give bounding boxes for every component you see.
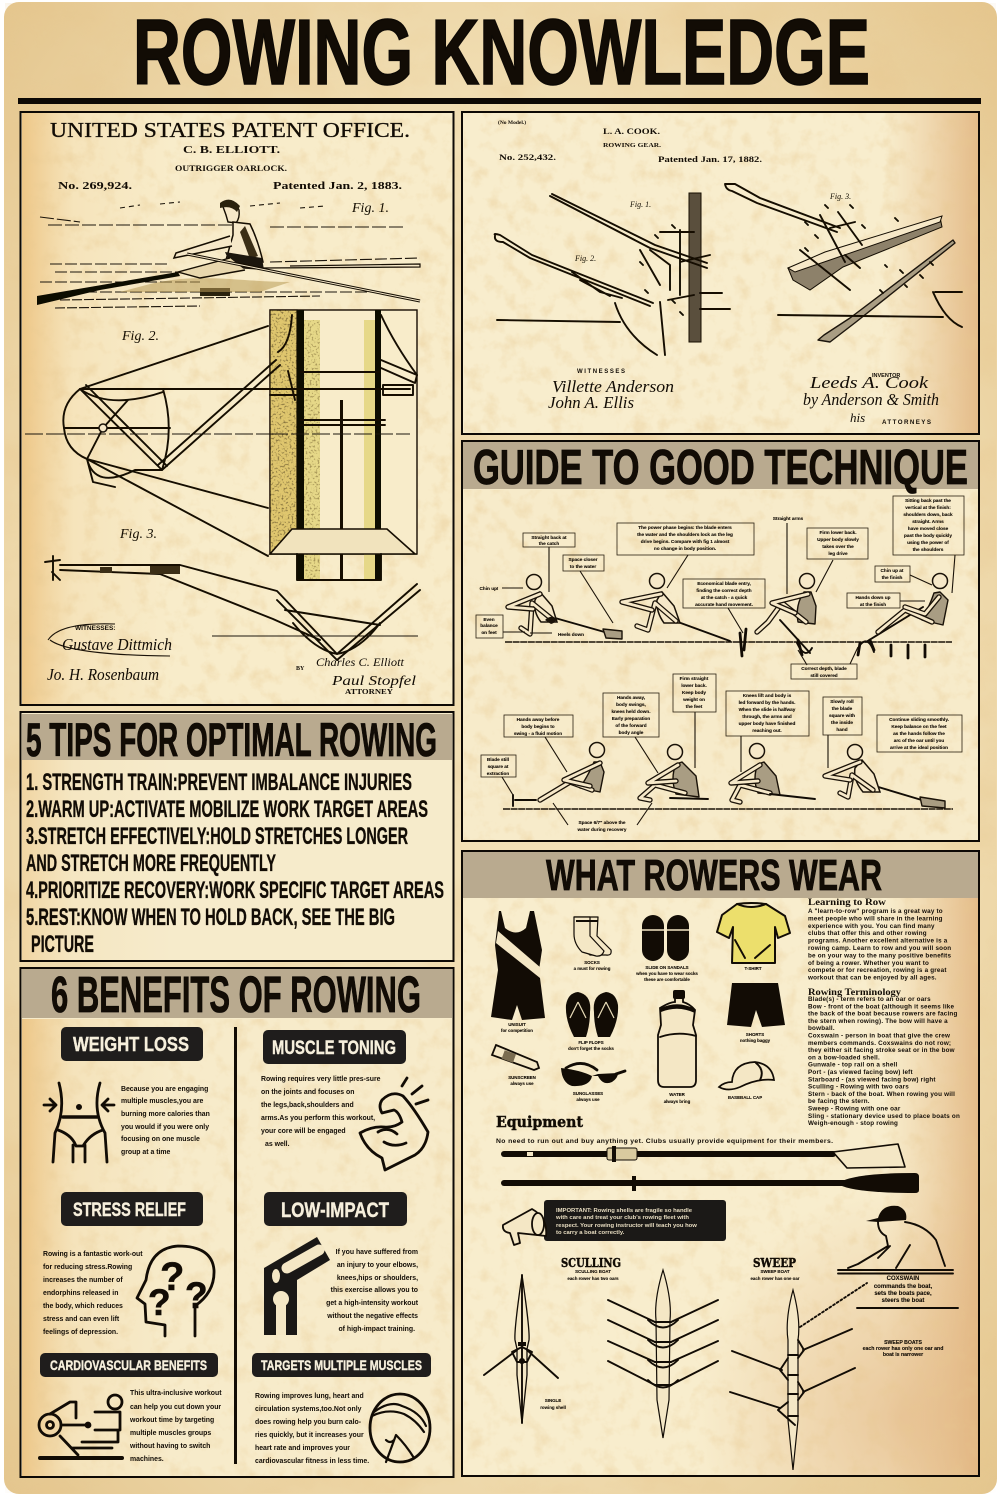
sculling label: each rower has two oars bbox=[567, 1276, 619, 1281]
benefit: cardiovascular: multiple muscles groups bbox=[130, 1430, 211, 1437]
callouts: top row: Chin up! bbox=[479, 586, 499, 591]
benefit: muscle toning: on the joints and focuses on bbox=[261, 1089, 354, 1096]
icon: head with question marks: ? bbox=[148, 1282, 171, 1323]
signatures bbox=[548, 369, 939, 426]
callouts: top row: Correct depth, blade bbox=[801, 666, 847, 671]
important notice: to carry a boat correctly. bbox=[556, 1230, 625, 1236]
callouts: bottom row: Space 6/7" above the bbox=[578, 820, 626, 825]
tips list: 5.REST:KNOW WHEN TO HOLD BACK, SEE THE BIG bbox=[26, 904, 395, 931]
benefit: cardiovascular: machines. bbox=[130, 1456, 164, 1463]
label: SOCKS bbox=[584, 960, 600, 965]
coxswain figure: COXSWAIN bbox=[887, 1276, 919, 1282]
callouts: top row: drive begins. Compare with fig 1 almost bbox=[641, 539, 730, 544]
text: rowing terminology: the back of the boat because rowers are facing bbox=[808, 1011, 958, 1018]
signatures: Leeds A. Cook bbox=[809, 373, 929, 392]
benefit: stress relief: feelings of depression. bbox=[43, 1329, 118, 1336]
benefit: muscle toning bbox=[261, 1030, 428, 1170]
callouts: top row: to the water bbox=[570, 564, 596, 569]
callouts: top row: Straight arms bbox=[773, 516, 804, 521]
patent heading: ROWING GEAR. bbox=[603, 143, 662, 149]
benefit: low-impact: get a high-intensity workout bbox=[326, 1300, 419, 1307]
callouts: top row: Chin up at bbox=[881, 568, 904, 573]
label: WATER bbox=[669, 1092, 686, 1097]
benefit: weight loss: burning more calories than bbox=[121, 1111, 210, 1118]
label: when you have to wear socks bbox=[635, 971, 698, 976]
benefit: stress relief: for reducing stress.Rowing bbox=[43, 1264, 132, 1271]
callouts: bottom row: Hands away before bbox=[517, 717, 560, 722]
label: nothing baggy bbox=[740, 1038, 771, 1043]
icon: slide-on sandals bbox=[642, 915, 689, 961]
text: rowing terminology: Gunwale - top rail on a shell bbox=[808, 1062, 897, 1069]
patent heading bbox=[498, 119, 762, 164]
icon: rowing machine bbox=[39, 1395, 122, 1458]
signatures: by Anderson & Smith bbox=[803, 390, 939, 409]
icon: shorts bbox=[727, 983, 785, 1027]
callouts: bottom row bbox=[481, 674, 962, 832]
rower 1: catch bbox=[508, 574, 622, 639]
text: learning to row: programs. Another excellent alternative is a bbox=[808, 938, 948, 945]
callouts: bottom row: Knees lift and body is bbox=[743, 693, 792, 698]
callouts: top row: the catch bbox=[539, 541, 559, 546]
tips list: 3.STRETCH EFFECTIVELY:HOLD STRETCHES LONGER bbox=[26, 823, 408, 850]
callouts: bottom row: upper body have finished bbox=[739, 721, 796, 726]
icon: head with question marks: ? bbox=[185, 1275, 208, 1316]
callouts: bottom row: extraction bbox=[487, 771, 509, 776]
callouts: top row: still covered bbox=[810, 673, 838, 678]
icon: knee joint bbox=[264, 1237, 330, 1335]
sweep boats note: SWEEP BOATS bbox=[884, 1340, 922, 1346]
coxswain figure: commands the boat, bbox=[874, 1284, 933, 1290]
benefit: targets multiple muscles: Rowing improves lung, heart and bbox=[255, 1393, 364, 1400]
text: rowing terminology: bowball. bbox=[808, 1025, 835, 1032]
benefit: low-impact: knees,hips or shoulders, bbox=[337, 1275, 418, 1282]
callouts: bottom row: body swings, bbox=[616, 702, 646, 707]
figures 1 and 2: oar gear side views: Fig. 1. bbox=[629, 200, 651, 209]
icon: head with question marks: ? bbox=[160, 1255, 184, 1299]
callouts: bottom row: the blade bbox=[832, 706, 853, 711]
callouts: top row: Sitting back past the bbox=[905, 498, 951, 503]
text: learning to row: Learning to Row bbox=[808, 898, 886, 908]
callouts: bottom row: water during recovery bbox=[577, 827, 627, 832]
signatures: John A. Ellis bbox=[548, 393, 634, 412]
callouts: top row: Economical blade entry, bbox=[697, 581, 751, 586]
patent heading: OUTRIGGER OARLOCK. bbox=[175, 164, 287, 173]
benefit: cardiovascular: can help you cut down your bbox=[130, 1404, 221, 1411]
callouts: top row: at the catch - a quick bbox=[701, 595, 748, 600]
tips list bbox=[26, 769, 444, 958]
text: learning to row: clubs that offer this and other rowing bbox=[808, 930, 927, 937]
text: rowing terminology: Port - (as viewed facing bow) left bbox=[808, 1069, 913, 1076]
callouts: top row: straight. Arms bbox=[912, 519, 944, 524]
figures 3 and 4: boat gear views: Fig. 3. bbox=[829, 192, 851, 201]
callouts: bottom row: Keep balance on the feet bbox=[891, 724, 947, 729]
signatures: WITNESSES: bbox=[75, 625, 115, 632]
icon: waist bbox=[44, 1083, 114, 1162]
heading band bbox=[22, 966, 452, 1023]
icon: head with question marks bbox=[137, 1246, 214, 1336]
text: learning to row: of being a rower. Whether you want to bbox=[808, 960, 929, 967]
callouts: top row: balance bbox=[480, 623, 498, 628]
text: learning to row: rowing camp. Learn to row and you will soon bbox=[808, 945, 951, 952]
tips list: 2.WARM UP:ACTIVATE MOBILIZE WORK TARGET AREAS bbox=[26, 796, 428, 823]
text: learning to row: compete or for recreation, rowing is a great bbox=[808, 967, 947, 974]
heading band: 6 BENEFITS OF ROWING bbox=[51, 966, 421, 1023]
callouts: bottom row: swing - a fluid motion bbox=[514, 731, 562, 736]
label: always use bbox=[576, 1097, 600, 1102]
text: learning to row: experience with you. You can find many bbox=[808, 923, 935, 930]
sculling label bbox=[561, 1256, 621, 1281]
text: rowing terminology: Sculling - Rowing with two oars bbox=[808, 1084, 909, 1091]
text: rowing terminology: Coxswain - person in boat that give the crew bbox=[808, 1032, 950, 1040]
benefit: weight loss: WEIGHT LOSS bbox=[73, 1034, 189, 1056]
waterlines bbox=[503, 629, 953, 809]
text: rowing terminology: Sweep - Rowing with one oar bbox=[808, 1106, 901, 1112]
text: rowing terminology: be facing the stern. bbox=[808, 1098, 870, 1105]
leader lines bbox=[502, 523, 955, 825]
callouts: top row: past the body quickly bbox=[904, 533, 952, 538]
callouts: top row: accurate hand movement. bbox=[695, 602, 753, 607]
text: learning to row: A "learn-to-row" program is a great way to bbox=[808, 908, 943, 915]
signatures: Gustave Dittmich bbox=[62, 635, 172, 654]
text: learning to row bbox=[807, 898, 951, 982]
panel: guide to good technique bbox=[462, 441, 979, 841]
clothing and kit icons bbox=[491, 903, 790, 1104]
callouts: bottom row: body angle bbox=[619, 730, 644, 735]
icon: sunscreen bbox=[492, 1045, 539, 1070]
benefit: muscle toning: MUSCLE TONING bbox=[272, 1038, 396, 1059]
signatures: WITNESSES bbox=[577, 369, 625, 375]
patent heading: UNITED STATES PATENT OFFICE. bbox=[50, 118, 410, 142]
benefit: weight loss: Because you are engaging bbox=[121, 1086, 208, 1093]
benefit: muscle toning: your core will be engaged bbox=[261, 1128, 346, 1135]
callouts: bottom row: knees held down. bbox=[611, 709, 651, 714]
important notice: IMPORTANT: Rowing shells are fragile so handle bbox=[556, 1208, 693, 1214]
signatures: Charles C. Elliott bbox=[316, 655, 405, 669]
sweep boats note: boat is narrower bbox=[883, 1352, 923, 1358]
benefit: low-impact: of high-impact training. bbox=[338, 1326, 415, 1333]
benefit: cardiovascular: This ultra-inclusive workout bbox=[130, 1390, 222, 1397]
callouts: bottom row: Continue sliding smoothly. bbox=[889, 717, 949, 722]
benefit: low-impact: this exercise allows you to bbox=[331, 1287, 418, 1294]
callouts: bottom row: the feet bbox=[686, 704, 703, 709]
callouts: top row: no change in body position. bbox=[654, 546, 716, 551]
benefit: low-impact: LOW-IMPACT bbox=[281, 1199, 389, 1222]
benefit: stress relief: increases the number of bbox=[43, 1277, 123, 1284]
boat diagrams bbox=[484, 1206, 958, 1470]
text: rowing terminology: the stern when rowing). The bow will have a bbox=[808, 1018, 948, 1025]
signatures: his bbox=[850, 410, 865, 425]
callouts: top row bbox=[476, 496, 964, 679]
icon: water bottle bbox=[658, 990, 696, 1087]
sweep oar bbox=[504, 1173, 919, 1193]
benefit: weight loss: group at a time bbox=[121, 1149, 171, 1156]
patent heading: L. A. COOK. bbox=[603, 127, 660, 136]
callouts: top row: takes over the bbox=[822, 544, 854, 549]
benefit: targets multiple muscles bbox=[252, 1353, 431, 1465]
label: SHORTS bbox=[746, 1032, 764, 1037]
tips list: 4.PRIORITIZE RECOVERY:WORK SPECIFIC TARGET AREAS bbox=[26, 877, 444, 904]
callouts: top row: shoulders down, back bbox=[903, 512, 953, 517]
tips list: 1. STRENGTH TRAIN:PREVENT IMBALANCE INJURIES bbox=[26, 769, 412, 796]
panel: 6 benefits of rowing bbox=[20, 966, 454, 1477]
heading band bbox=[22, 713, 452, 766]
callouts: top row: Upper body slowly bbox=[817, 537, 859, 542]
sweep eight diagram bbox=[730, 1283, 867, 1470]
text: learning to row: workout that can be enjoyed by all ages. bbox=[807, 975, 937, 982]
benefit: muscle toning: arms.As you perform this workout, bbox=[261, 1115, 375, 1122]
callouts: top row: The power phase begins: the blade enters bbox=[638, 525, 732, 530]
rower figures: bottom row, recovery bbox=[513, 742, 945, 808]
icon: unisuit bbox=[491, 911, 545, 1020]
text: learning to row: be on your way to the many positive benefits bbox=[808, 952, 951, 959]
benefit: stress relief: STRESS RELIEF bbox=[73, 1200, 186, 1221]
label: always bring bbox=[664, 1099, 691, 1104]
quad scull diagram bbox=[608, 1270, 718, 1438]
label: FLIP FLOPS bbox=[578, 1040, 604, 1045]
label: SUNSCREEN bbox=[508, 1075, 536, 1080]
patent heading: (No Model.) bbox=[498, 119, 526, 126]
coxswain figure: sets the boats pace, bbox=[874, 1291, 932, 1297]
benefit: targets multiple muscles: TARGETS MULTIPLE MUSCLES bbox=[261, 1357, 422, 1373]
callouts: bottom row: Slowly roll bbox=[830, 699, 854, 704]
text: rowing terminology: Blade(s) - term refers to an oar or oars bbox=[808, 996, 931, 1003]
callouts: bottom row: reaching out. bbox=[752, 728, 782, 733]
benefit: targets multiple muscles: heart rate and improves your bbox=[255, 1445, 350, 1452]
icon: flip flops bbox=[566, 992, 618, 1037]
callouts: bottom row: lower back. bbox=[681, 683, 707, 688]
callouts: bottom row: through, the arms and bbox=[742, 714, 792, 719]
callouts: top row: finding the correct depth bbox=[696, 588, 752, 593]
text: rowing terminology: on a bow-loaded shell. bbox=[808, 1054, 880, 1061]
patent heading bbox=[50, 118, 410, 192]
benefit: cardiovascular bbox=[39, 1353, 222, 1463]
tips list: AND STRETCH MORE FREQUENTLY bbox=[26, 850, 276, 877]
benefit: muscle toning: Rowing requires very little pres-sure bbox=[261, 1076, 381, 1083]
callouts: bottom row: body begins to bbox=[521, 724, 555, 729]
text: rowing terminology bbox=[808, 988, 960, 1127]
patent heading: Patented Jan. 17, 1882. bbox=[658, 155, 762, 164]
icon: megaphone bbox=[503, 1209, 546, 1245]
figure 2: outrigger plan view bbox=[25, 310, 417, 580]
callouts: top row: the water and the shoulders lock as the leg bbox=[637, 532, 733, 537]
text: rowing terminology: Rowing Terminology bbox=[808, 988, 901, 998]
icon: circled muscle bbox=[370, 1394, 430, 1462]
rower 6: arms away bbox=[640, 744, 708, 800]
figure 1: rower in scull bbox=[37, 200, 420, 308]
sculling label: SCULLING bbox=[561, 1256, 621, 1270]
coxswain figure: steers the boat bbox=[882, 1298, 924, 1304]
text: rowing terminology: Starboard - (as viewed facing bow) right bbox=[808, 1076, 936, 1083]
label: these are comfortable bbox=[644, 977, 690, 982]
callouts: top row: vertical at the finish: bbox=[905, 505, 951, 510]
patent heading: No. 269,924. bbox=[58, 180, 132, 192]
callouts: top row: leg drive bbox=[828, 551, 848, 556]
equipment note: No need to run out and buy anything yet. Clubs usually provide equipment for their members. bbox=[496, 1138, 833, 1145]
signatures: Paul Stopfel bbox=[331, 674, 416, 689]
benefit: cardiovascular: without having to switch bbox=[129, 1443, 210, 1450]
label: don't forget the socks bbox=[568, 1046, 614, 1051]
benefit: muscle toning: as well. bbox=[265, 1141, 290, 1148]
sweep label: SWEEP bbox=[753, 1256, 796, 1270]
patent heading: C. B. ELLIOTT. bbox=[183, 145, 280, 156]
callouts: bottom row: Early preparation bbox=[612, 716, 650, 721]
benefit: low-impact: If you have suffered from bbox=[336, 1249, 418, 1256]
single scull diagram bbox=[484, 1275, 566, 1423]
rower 5: extraction bbox=[513, 742, 604, 806]
label: for competition bbox=[501, 1028, 533, 1033]
benefit: low-impact: an injury to your elbows, bbox=[337, 1262, 418, 1269]
benefit: muscle toning: the legs,back,shoulders and bbox=[261, 1102, 354, 1109]
heading band: 5 TIPS FOR OPTIMAL ROWING bbox=[26, 713, 437, 766]
figure 2: outrigger plan view: Fig. 3. bbox=[119, 527, 157, 542]
benefit: stress relief: Rowing is a fantastic work-out bbox=[43, 1251, 143, 1258]
benefit: weight loss: multiple muscles,you are bbox=[121, 1098, 204, 1105]
callouts: top row: at the finish bbox=[860, 602, 886, 607]
signatures bbox=[47, 624, 416, 696]
rower 8: ready for catch bbox=[825, 744, 945, 808]
callouts: top row: Space closer bbox=[569, 557, 598, 562]
signatures: INVENTOR bbox=[872, 373, 900, 379]
panel: rowing gear patent bbox=[462, 112, 979, 434]
title rule bbox=[18, 98, 981, 104]
important notice: with care and treat your club's rowing fleet with bbox=[555, 1215, 689, 1221]
figures 3 and 4: boat gear views bbox=[725, 184, 962, 342]
callouts: bottom row: arrive at the ideal position bbox=[890, 745, 948, 750]
text: rowing terminology: members commands. Coxswains do not row; bbox=[808, 1040, 951, 1047]
callouts: top row: on feet bbox=[481, 630, 497, 635]
panel: outrigger patent bbox=[20, 112, 454, 705]
benefit: targets multiple muscles: cardiovascular fitness in less time. bbox=[255, 1458, 369, 1465]
callouts: bottom row: led forward by the hands. bbox=[739, 700, 795, 705]
callouts: bottom row: Keep body bbox=[682, 690, 706, 695]
benefit: targets multiple muscles: does rowing help you burn calo- bbox=[255, 1419, 362, 1426]
text: rowing terminology: Bow - front of the boat (although it seems like bbox=[808, 1003, 954, 1010]
benefit: weight loss: you would if you were only bbox=[121, 1124, 209, 1131]
text: rowing terminology: Weigh-enough - stop rowing bbox=[808, 1120, 898, 1127]
label: T-SHIRT bbox=[744, 966, 762, 971]
patent heading: Patented Jan. 2, 1883. bbox=[273, 180, 402, 192]
callouts: top row: Straight back at bbox=[531, 535, 567, 540]
callouts: bottom row: arc of the oar until you bbox=[894, 738, 944, 743]
icon: baseball cap bbox=[719, 1062, 774, 1090]
callouts: top row: Even bbox=[483, 617, 495, 622]
callouts: bottom row: Hands away, bbox=[617, 695, 645, 700]
callouts: top row: have moved close bbox=[908, 526, 949, 531]
label: UNISUIT bbox=[508, 1022, 526, 1027]
rower figures: top row, catch to finish bbox=[508, 574, 948, 653]
callouts: top row: the shoulders bbox=[913, 547, 944, 552]
sculling oar bbox=[504, 1144, 905, 1168]
sweep label: SWEEP BOAT bbox=[760, 1269, 790, 1274]
label: SUNGLASSES bbox=[573, 1091, 603, 1096]
callouts: top row: Heels down bbox=[558, 632, 584, 637]
equipment section bbox=[496, 1113, 919, 1245]
callouts: bottom row: the inside bbox=[831, 720, 853, 725]
text: rowing terminology: they either sit facing stroke seat or in the bow bbox=[808, 1047, 955, 1054]
important notice bbox=[544, 1200, 726, 1241]
panel: what rowers wear bbox=[462, 851, 979, 1476]
label: BASEBALL CAP bbox=[728, 1095, 762, 1100]
icon: t-shirt bbox=[717, 903, 790, 963]
signatures: Jo. H. Rosenbaum bbox=[47, 665, 159, 684]
callouts: top row: the finish bbox=[882, 575, 903, 580]
label: always use bbox=[510, 1081, 534, 1086]
figure 3: boat section view bbox=[45, 556, 420, 660]
sweep label: each rower has one oar bbox=[750, 1276, 800, 1281]
panel: 5 tips for optimal rowing bbox=[20, 712, 454, 961]
callouts: bottom row: square at bbox=[488, 764, 509, 769]
rower 3: drive bbox=[757, 574, 816, 653]
signatures: ATTORNEY bbox=[345, 688, 393, 696]
benefit: weight loss: focusing on one muscle bbox=[121, 1136, 200, 1143]
centre divider bbox=[234, 1027, 237, 1464]
single scull diagram: SINGLE bbox=[545, 1398, 561, 1403]
text: rowing terminology: Stern - back of the boat. When rowing you will bbox=[808, 1091, 955, 1098]
benefit: weight loss bbox=[44, 1027, 210, 1162]
benefit: stress relief: the body, which reduces bbox=[43, 1303, 123, 1310]
figure 2: outrigger plan view: Fig. 2. bbox=[121, 329, 159, 344]
text: rowing terminology: Sling - stationary device used to place boats on bbox=[808, 1113, 960, 1120]
label: a must for rowing bbox=[574, 966, 611, 971]
benefit: stress relief: stress and can even lift bbox=[43, 1316, 120, 1323]
benefit: cardiovascular: workout time by targeting bbox=[129, 1417, 214, 1424]
callouts: top row: Hands down up bbox=[856, 595, 891, 600]
figures 1 and 2: oar gear side views bbox=[495, 193, 730, 355]
figure 1: rower in scull: Fig. 1. bbox=[351, 201, 389, 216]
callouts: bottom row: Blade still bbox=[487, 757, 509, 762]
sweep label bbox=[750, 1256, 800, 1281]
sculling label: SCULLING BOAT bbox=[575, 1269, 611, 1274]
signatures: ATTORNEYS bbox=[882, 419, 931, 426]
callouts: bottom row: as the hands follow the bbox=[893, 731, 945, 736]
text: learning to row: meet people who will share in the learning bbox=[808, 915, 943, 922]
benefit: low-impact: without the negative effects bbox=[326, 1313, 418, 1320]
callouts: bottom row: square with bbox=[829, 713, 855, 718]
callouts: top row: Firm lower back. bbox=[820, 530, 856, 535]
patent heading: No. 252,432. bbox=[499, 153, 556, 162]
single scull diagram: rowing shell bbox=[540, 1405, 566, 1410]
icon: sunglasses bbox=[561, 1063, 625, 1086]
label: SLIDE ON SANDALS bbox=[645, 965, 689, 970]
benefit: targets multiple muscles: circulation systems,too.Not only bbox=[255, 1406, 362, 1413]
rower 2: power phase bbox=[622, 574, 730, 641]
benefit: cardiovascular: CARDIOVASCULAR BENEFITS bbox=[50, 1357, 207, 1373]
callouts: bottom row: When the slide is halfway bbox=[739, 707, 796, 712]
rower 7: knees lift bbox=[731, 744, 815, 802]
tips list: PICTURE bbox=[31, 931, 94, 958]
icon: socks bbox=[574, 917, 611, 956]
benefit: stress relief: endorphins released in bbox=[43, 1290, 118, 1297]
rower 4: finish bbox=[866, 574, 948, 642]
callouts: bottom row: hand bbox=[836, 727, 848, 732]
signatures: Villette Anderson bbox=[552, 377, 674, 396]
sweep boats note: each rower has only one oar and bbox=[863, 1346, 943, 1352]
figures 1 and 2: oar gear side views: Fig. 2. bbox=[574, 254, 596, 263]
important notice: respect. Your rowing instructor will teach you how bbox=[556, 1223, 697, 1229]
callouts: bottom row: of the forward bbox=[615, 723, 647, 728]
icon: flexed arm bbox=[360, 1078, 428, 1170]
callouts: top row: using the power of bbox=[907, 540, 949, 545]
coxswain figure bbox=[838, 1206, 958, 1308]
benefit: low-impact bbox=[264, 1192, 419, 1335]
callouts: bottom row: Firm straight bbox=[680, 676, 709, 681]
callouts: bottom row: weight on bbox=[682, 697, 705, 702]
equipment heading: Equipment bbox=[496, 1113, 583, 1131]
benefit: stress relief bbox=[43, 1192, 214, 1336]
benefit: targets multiple muscles: ries quickly, but it increases your bbox=[255, 1432, 364, 1439]
signatures: BY bbox=[296, 666, 305, 672]
